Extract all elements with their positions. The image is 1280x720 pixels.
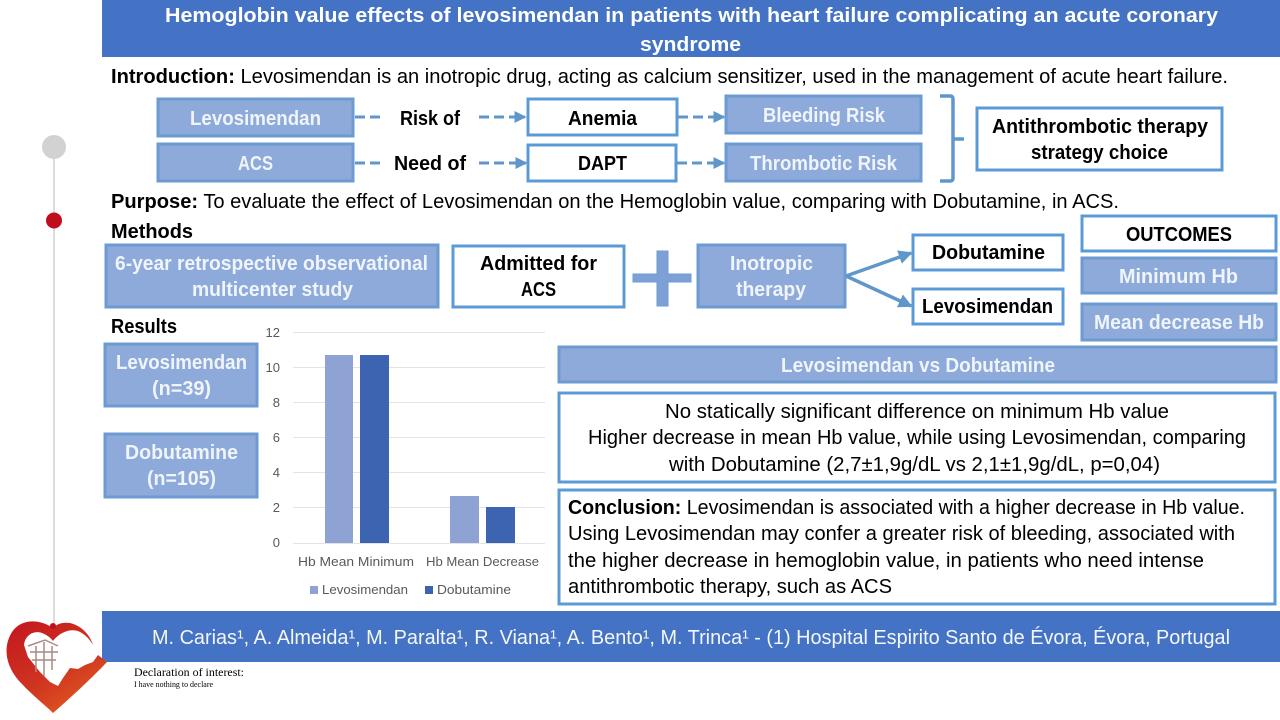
flow: levosimendan to bleeding risk [158, 96, 921, 136]
box: Thrombotic Risk: Thrombotic Risk [750, 153, 898, 175]
box: Levosimendan n=39: Levosimendan [116, 352, 247, 374]
title banner: syndrome [640, 34, 741, 56]
declaration of interest [134, 665, 244, 689]
banner: Levosimendan vs Dobutamine: Levosimendan vs Dobutamine [781, 355, 1055, 377]
dashed arrow to Bleeding Risk [678, 116, 724, 118]
conclusion box: the higher decrease in hemoglobin value, in patients who need intense [568, 550, 1204, 572]
box: antithrombotic therapy strategy choice: strategy choice [1031, 142, 1168, 164]
legend: Levosimendan [322, 582, 408, 597]
y axis labels: 4 [273, 465, 280, 480]
box: admitted for ACS: ACS [521, 279, 556, 301]
box: Minimum Hb [1082, 258, 1276, 293]
heading: Results: Results [111, 316, 177, 338]
results text box: No statically significant difference on minimum Hb value [665, 401, 1169, 423]
box: inotropic therapy: Inotropic [730, 253, 813, 275]
label: Risk of: Risk of [400, 108, 460, 130]
box: Dobutamine [913, 235, 1063, 270]
arrow to Dobutamine [846, 253, 911, 276]
box: study design: 6-year retrospective observational [115, 253, 428, 275]
results text box: Higher decrease in mean Hb value, while using Levosimendan, comparing [588, 427, 1246, 449]
bars: Hb mean minimum [325, 355, 389, 543]
box: DAPT: DAPT [578, 153, 627, 175]
legend [310, 582, 511, 597]
bracket [940, 96, 964, 181]
box: Dobutamine: Dobutamine [932, 242, 1045, 264]
label: Need of: Need of [394, 153, 466, 175]
box: Levosimendan [158, 99, 353, 136]
y axis labels: 6 [273, 430, 280, 445]
box: ACS [158, 144, 353, 181]
box: antithrombotic therapy strategy choice: Antithrombotic therapy [992, 116, 1209, 138]
banner: Levosimendan vs Dobutamine [559, 347, 1276, 382]
y axis labels: 10 [266, 360, 280, 375]
conclusion box: antithrombotic therapy, such as ACS [568, 576, 892, 598]
introduction text: Introduction: Levosimendan is an inotropic drug, acting as calcium sensitizer, used in the management of acute heart failure. [111, 66, 1228, 88]
purpose text: Purpose: To evaluate the effect of Levosimendan on the Hemoglobin value, comparing with Dobutamine, in ACS. [111, 191, 1119, 213]
box: Mean decrease Hb: Mean decrease Hb [1094, 312, 1264, 334]
box: ACS: ACS [238, 153, 273, 175]
bars: Hb mean decrease [450, 496, 515, 543]
timeline decoration [42, 135, 66, 627]
box: Bleeding Risk: Bleeding Risk [763, 105, 886, 127]
box: Thrombotic Risk [726, 144, 921, 181]
box: inotropic therapy: therapy [736, 279, 807, 301]
results text box [559, 393, 1275, 482]
box: Bleeding Risk [726, 96, 921, 133]
box: antithrombotic therapy strategy choice [977, 108, 1222, 170]
dashed arrow to Thrombotic Risk [677, 162, 724, 164]
results text box: with Dobutamine (2,7±1,9g/dL vs 2,1±1,9g/dL, p=0,04) [668, 454, 1160, 476]
declaration of interest: I have nothing to declare [134, 680, 213, 689]
box: Levosimendan: Levosimendan [922, 296, 1053, 318]
box: Dobutamine n=105: (n=105) [147, 468, 216, 490]
box: Levosimendan n=39 [105, 344, 257, 406]
box: OUTCOMES: OUTCOMES [1126, 224, 1232, 246]
conclusion box: Conclusion: Levosimendan is associated with a higher decrease in Hb value. [568, 497, 1245, 519]
category labels [298, 554, 539, 569]
conclusion box: Using Levosimendan may confer a greater risk of bleeding, associated with [568, 523, 1235, 545]
box: admitted for ACS: Admitted for [480, 253, 597, 275]
box: Anemia: Anemia [568, 108, 638, 130]
arrow to Levosimendan [846, 276, 911, 306]
box: Levosimendan: Levosimendan [190, 108, 321, 130]
author banner [102, 611, 1280, 662]
box: Minimum Hb: Minimum Hb [1119, 266, 1238, 288]
box: study design [106, 245, 438, 307]
y axis labels: 0 [273, 535, 280, 550]
y axis labels [266, 325, 280, 550]
icon: heart logo [7, 621, 107, 713]
box: Levosimendan n=39: (n=39) [152, 378, 211, 400]
category labels: Hb Mean Minimum [298, 554, 414, 569]
icon: plus sign [633, 251, 691, 306]
box: admitted for ACS [453, 246, 624, 307]
box: study design: multicenter study [192, 279, 354, 301]
flow: ACS to thrombotic risk [158, 144, 921, 181]
author banner: M. Carias¹, A. Almeida¹, M. Paralta¹, R. Viana¹, A. Bento¹, M. Trinca¹ - (1) Hospital Espirito Santo de Évora, Évora, Portugal [152, 626, 1230, 649]
y axis labels: 12 [266, 325, 280, 340]
box: Dobutamine n=105 [105, 434, 257, 497]
box: DAPT [528, 145, 676, 181]
category labels: Hb Mean Decrease [426, 554, 539, 569]
box: Levosimendan [913, 289, 1063, 324]
dashed connector [355, 162, 381, 164]
conclusion box [559, 490, 1275, 604]
box: Anemia [528, 99, 677, 135]
title banner [102, 0, 1280, 57]
dashed arrow to DAPT [479, 162, 526, 164]
box: inotropic therapy [698, 245, 845, 307]
dashed arrow to Anemia [479, 116, 525, 118]
y axis labels: 2 [273, 500, 280, 515]
title banner: Hemoglobin value effects of levosimendan in patients with heart failure complicating an acute coronary [165, 5, 1219, 27]
box: Dobutamine n=105: Dobutamine [125, 442, 238, 464]
declaration of interest: Declaration of interest: [134, 665, 244, 679]
y axis labels: 8 [273, 395, 280, 410]
legend: Dobutamine [437, 582, 511, 597]
box: Mean decrease Hb [1082, 304, 1276, 340]
heading: Methods: Methods [111, 221, 193, 243]
bar chart [266, 325, 545, 597]
box: OUTCOMES [1082, 216, 1276, 251]
dashed connector [355, 116, 381, 118]
